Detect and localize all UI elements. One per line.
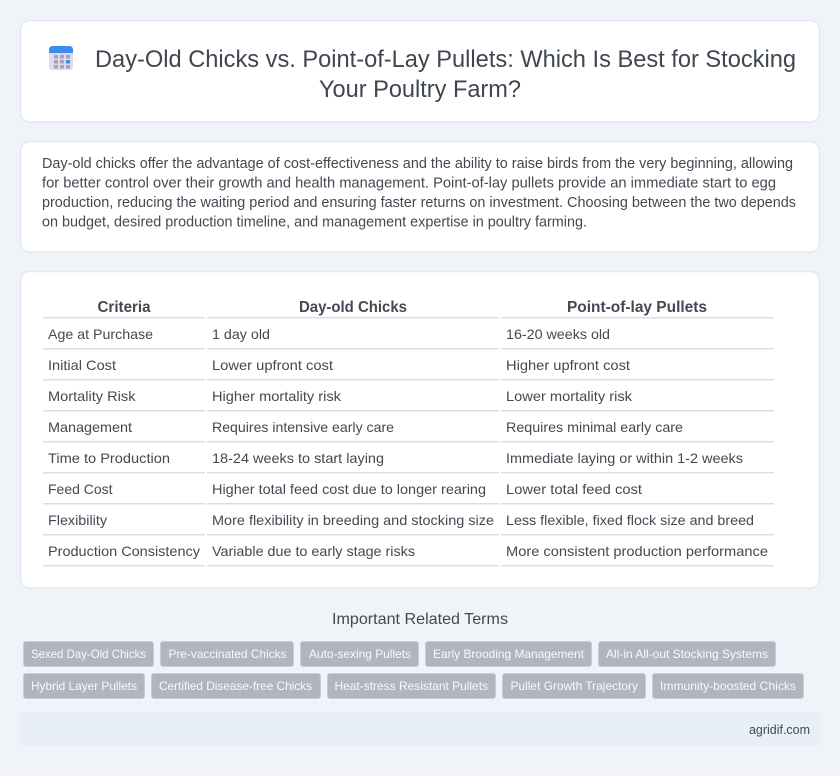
tag xyxy=(160,642,294,666)
panel: title card xyxy=(20,20,820,122)
footer: agridif.com xyxy=(749,723,810,737)
row: flexibility: Flexibility xyxy=(48,512,107,528)
row: flexibility xyxy=(43,512,774,536)
row: initial cost xyxy=(43,357,774,380)
row: feed cost: Higher total feed cost due to longer rearing xyxy=(212,481,486,497)
panel: comparison table xyxy=(20,272,820,588)
title: Your Poultry Farm? xyxy=(319,76,521,103)
tags: related terms xyxy=(24,642,804,698)
tag: Early Brooding Management xyxy=(433,647,585,661)
tag xyxy=(652,674,804,698)
row: age at purchase xyxy=(43,326,774,350)
row: mortality risk: Higher mortality risk xyxy=(212,388,342,404)
table header xyxy=(43,299,774,318)
text block: summary: for better control over their growth and health management. Point-of-lay pullets provide an immediate start to egg xyxy=(42,176,776,192)
tag xyxy=(24,642,154,666)
row: time to production xyxy=(43,450,774,474)
tag: Pullet Growth Trajectory xyxy=(510,679,638,693)
text block: summary: production, reducing the waiting period and ensuring faster returns on investment. Choosing between the two depends xyxy=(42,195,796,211)
tag: Sexed Day-Old Chicks xyxy=(31,647,146,661)
row: time to production: 18-24 weeks to start laying xyxy=(212,450,384,466)
tag: Certified Disease-free Chicks xyxy=(159,679,312,693)
row: production consistency: Variable due to early stage risks xyxy=(212,543,415,559)
row: flexibility: More flexibility in breeding and stocking size xyxy=(212,512,494,528)
footer xyxy=(20,712,820,746)
row: age at purchase: Age at Purchase xyxy=(48,326,153,342)
row: age at purchase: 16-20 weeks old xyxy=(506,326,610,342)
row: time to production: Time to Production xyxy=(48,450,170,466)
row: management: Requires intensive early care xyxy=(212,419,394,435)
row: time to production: Immediate laying or within 1-2 weeks xyxy=(506,450,743,466)
text block: summary: on budget, desired production timeline, and management expertise in poultry farming. xyxy=(42,214,587,230)
row: production consistency xyxy=(43,543,774,566)
row: flexibility: Less flexible, fixed flock size and breed xyxy=(506,512,754,528)
row: management: Requires minimal early care xyxy=(506,419,683,435)
tag: All-in All-out Stocking Systems xyxy=(606,647,768,661)
row: mortality risk: Mortality Risk xyxy=(48,388,137,404)
row: feed cost: Feed Cost xyxy=(48,481,113,497)
tag xyxy=(502,674,646,698)
row: production consistency: Production Consistency xyxy=(48,543,200,559)
tag: Heat-stress Resistant Pullets xyxy=(334,679,488,693)
row: feed cost: Lower total feed cost xyxy=(506,481,642,497)
tag: Auto-sexing Pullets xyxy=(309,647,411,661)
row: management: Management xyxy=(48,419,132,435)
row: production consistency: More consistent production performance xyxy=(506,543,768,559)
row: age at purchase: 1 day old xyxy=(212,326,270,342)
table header: Point-of-lay Pullets xyxy=(567,299,707,316)
table header: Day-old Chicks xyxy=(299,299,407,316)
row: mortality risk: Lower mortality risk xyxy=(506,388,633,404)
icon: calendar xyxy=(49,46,73,70)
row: initial cost: Higher upfront cost xyxy=(506,357,630,373)
table header: Criteria xyxy=(98,299,151,316)
row: management xyxy=(43,419,774,442)
tag xyxy=(152,674,320,698)
tag xyxy=(328,674,496,698)
heading: important related terms: Important Related Terms xyxy=(332,611,508,628)
title: Day-Old Chicks vs. Point-of-Lay Pullets: Which Is Best for Stocking xyxy=(95,46,796,73)
tag xyxy=(300,642,418,666)
tag xyxy=(24,674,144,698)
tag: Immunity-boosted Chicks xyxy=(660,679,796,693)
row: mortality risk xyxy=(43,388,774,412)
row: initial cost: Lower upfront cost xyxy=(212,357,333,373)
tag: Hybrid Layer Pullets xyxy=(31,679,137,693)
tag: Pre-vaccinated Chicks xyxy=(168,647,286,661)
row: feed cost xyxy=(43,481,774,504)
panel: summary paragraph xyxy=(20,142,820,252)
text block: summary: Day-old chicks offer the advantage of cost-effectiveness and the ability to raise birds from the very beginning, allowing xyxy=(42,156,793,172)
tag xyxy=(426,642,592,666)
tag xyxy=(598,642,776,666)
row: initial cost: Initial Cost xyxy=(48,357,116,373)
